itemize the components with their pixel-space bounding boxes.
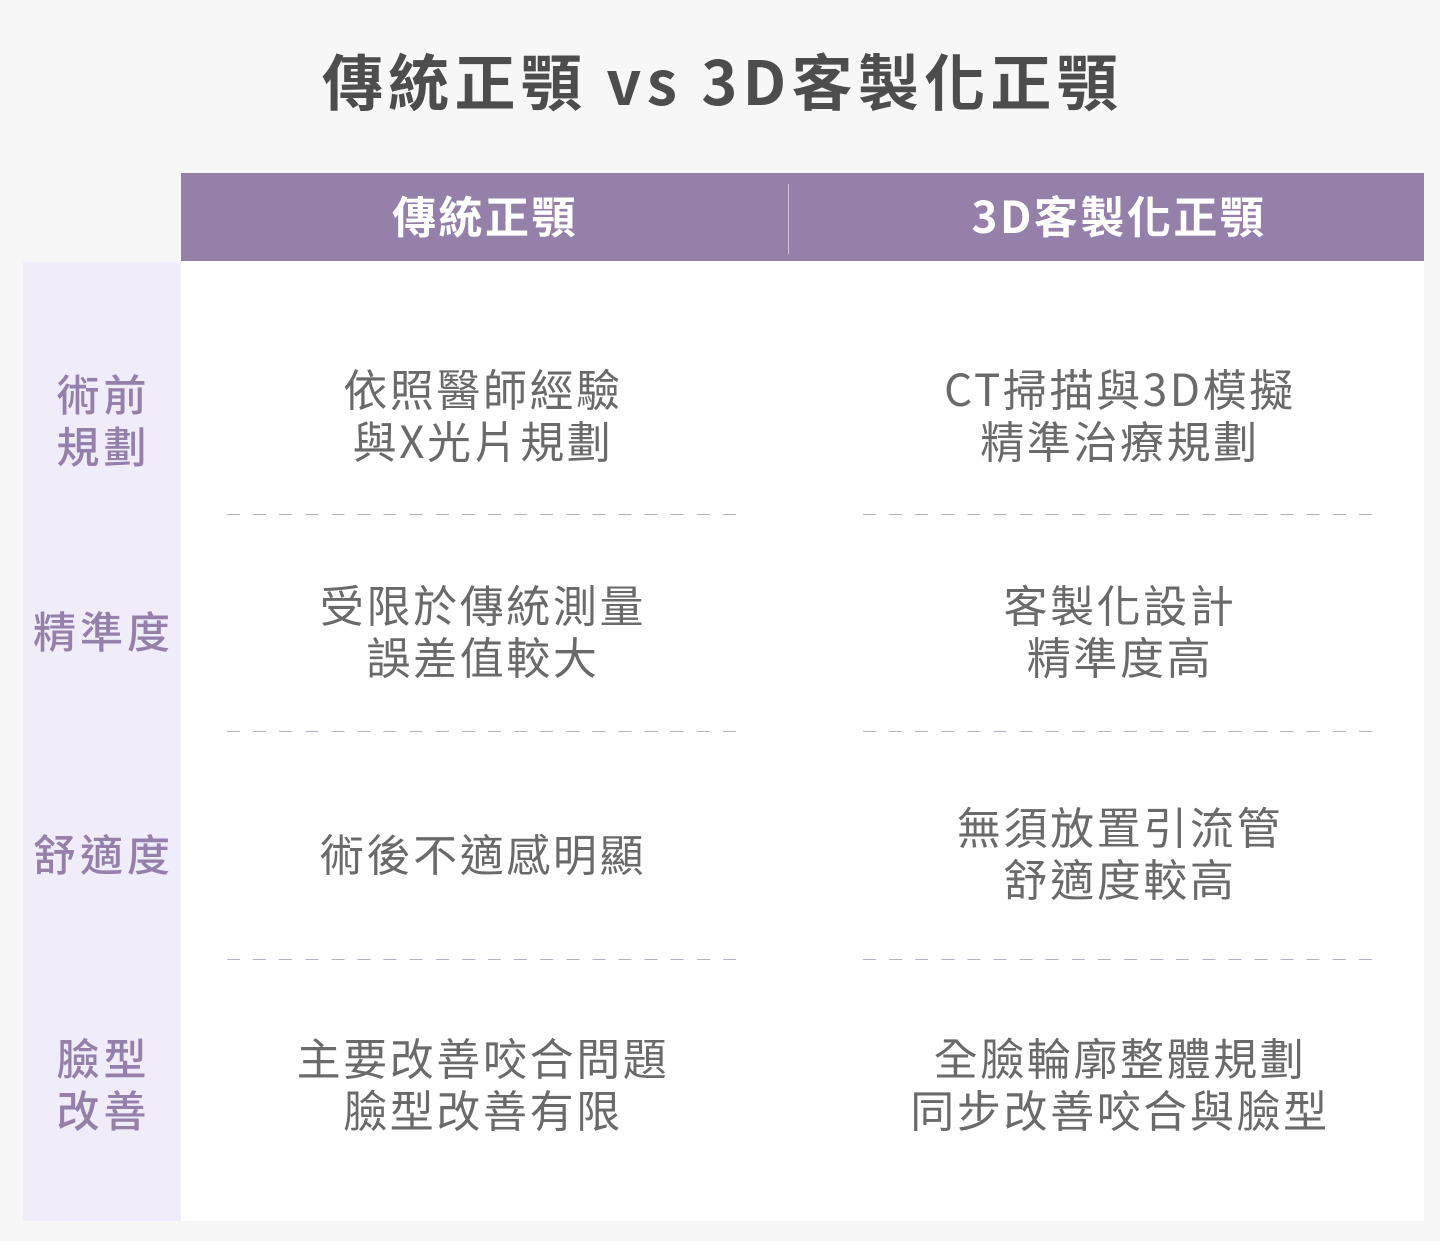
panel: row label column (23, 262, 181, 1221)
heading: traditional column: 傳統正顎 (392, 182, 578, 246)
cell: 3D precision: 精準度高 (1027, 623, 1213, 687)
panel: table body background (181, 261, 1424, 1221)
cell: traditional face shape: 臉型改善有限 (343, 1076, 623, 1140)
cell: traditional planning: 與X光片規劃 (353, 407, 613, 471)
cell: traditional precision: 誤差值較大 (366, 623, 600, 687)
cell: traditional face shape: 主要改善咬合問題 (297, 1024, 669, 1088)
cell: 3D comfort: 無須放置引流管 (957, 793, 1283, 857)
cell: traditional precision (320, 571, 646, 687)
row label: 術前規劃: 術前 (56, 362, 150, 424)
heading: 3D column: 3D客製化正顎 (972, 182, 1266, 246)
column divider (788, 184, 789, 254)
cell: 3D precision (1004, 571, 1236, 687)
row label: 術前規劃 (56, 362, 150, 476)
cell: 3D face shape (910, 1024, 1330, 1140)
cell: 3D comfort (957, 793, 1283, 909)
cell: traditional planning (343, 355, 623, 471)
cell: 3D planning: CT掃描與3D模擬 (944, 355, 1296, 419)
panel: header bar (181, 173, 1424, 261)
row label: 臉型改善 (56, 1026, 150, 1140)
cell: traditional precision: 受限於傳統測量 (320, 571, 646, 635)
cell: 3D planning (944, 355, 1296, 471)
cell: 3D planning: 精準治療規劃 (980, 407, 1260, 471)
row label: 舒適度: 舒適度 (33, 822, 174, 884)
title: 傳統正顎 vs 3D客製化正顎 (322, 34, 1123, 123)
row label: 精準度: 精準度 (33, 599, 174, 661)
cell: traditional planning: 依照醫師經驗 (343, 355, 623, 419)
cell: 3D face shape: 全臉輪廓整體規劃 (934, 1024, 1306, 1088)
cell: traditional face shape (297, 1024, 669, 1140)
cell: traditional comfort: 術後不適感明顯 (320, 820, 646, 884)
cell: 3D comfort: 舒適度較高 (1004, 845, 1236, 909)
row label: 臉型改善: 改善 (56, 1078, 150, 1140)
cell: 3D face shape: 同步改善咬合與臉型 (910, 1076, 1330, 1140)
row label: 臉型改善: 臉型 (56, 1026, 150, 1088)
cell: 3D precision: 客製化設計 (1004, 571, 1236, 635)
row label: 術前規劃: 規劃 (56, 414, 150, 476)
